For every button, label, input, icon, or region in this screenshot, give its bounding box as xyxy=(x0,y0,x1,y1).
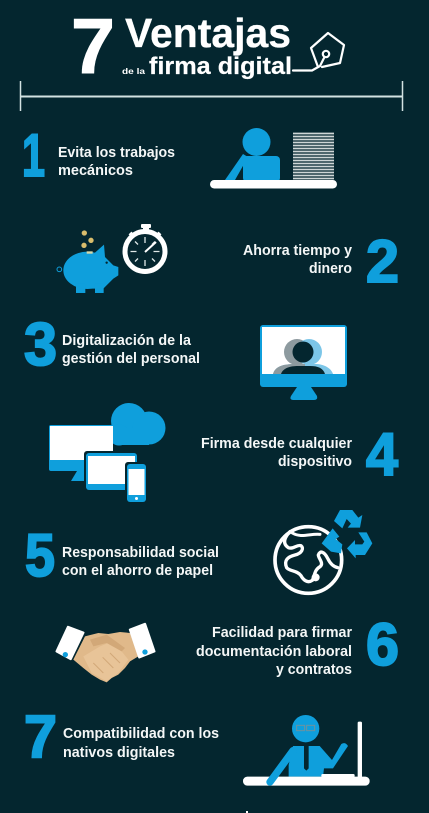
item 2 text xyxy=(243,243,352,277)
item 6 text: documentación laboral xyxy=(196,644,352,660)
item 6 text: Facilidad para firmar xyxy=(212,625,352,641)
title xyxy=(71,2,292,90)
item 6 text: y contratos xyxy=(276,662,352,678)
item 3 text: Digitalización de la xyxy=(62,333,192,349)
item 6 number: 6 xyxy=(366,611,399,678)
item 3 text xyxy=(62,333,200,367)
item 4 text xyxy=(201,436,352,470)
item 4 text: dispositivo xyxy=(278,454,352,470)
item 2 number: 2 xyxy=(366,228,399,295)
item 1 text: mecánicos xyxy=(58,163,133,179)
item 7 text: Compatibilidad con los xyxy=(63,726,219,742)
title: de la xyxy=(122,66,145,76)
item 6 text xyxy=(196,625,352,678)
item 3 number: 3 xyxy=(24,311,57,378)
item 2 text: dinero xyxy=(309,261,352,277)
item 4 number: 4 xyxy=(366,421,399,488)
item 5 text: con el ahorro de papel xyxy=(62,563,213,579)
icon: recycling arrows xyxy=(322,510,372,558)
item 7 number: 7 xyxy=(24,703,57,770)
icon: stopwatch xyxy=(125,224,165,272)
icon: monitor with person xyxy=(260,325,347,400)
icon: handshake xyxy=(57,624,154,682)
item 3 text: gestión del personal xyxy=(62,351,200,367)
icon: fountain pen nib xyxy=(293,33,344,70)
item 2 text: Ahorra tiempo y xyxy=(243,243,352,259)
icon: man with glasses at laptop xyxy=(243,715,370,786)
icon: globe xyxy=(275,527,342,593)
item 5 number: 5 xyxy=(25,522,55,589)
item 4 text: Firma desde cualquier xyxy=(201,436,352,452)
item 1 text xyxy=(58,145,175,179)
small cropped mark at bottom xyxy=(246,811,248,813)
item 7 text xyxy=(63,726,219,761)
icon: piggy bank with coins xyxy=(57,230,118,293)
title: 7 xyxy=(71,2,115,90)
header rule xyxy=(20,81,402,111)
item 1 number: 1 xyxy=(22,122,45,189)
icon: cloud and devices xyxy=(49,403,166,504)
title: firma digital xyxy=(149,53,292,80)
title: Ventajas xyxy=(125,10,291,56)
item 7 text: nativos digitales xyxy=(63,745,175,761)
item 1 text: Evita los trabajos xyxy=(58,145,175,161)
item 5 text xyxy=(62,545,219,579)
item 5 text: Responsabilidad social xyxy=(62,545,219,561)
icon: person at desk with paper stack xyxy=(210,128,337,188)
